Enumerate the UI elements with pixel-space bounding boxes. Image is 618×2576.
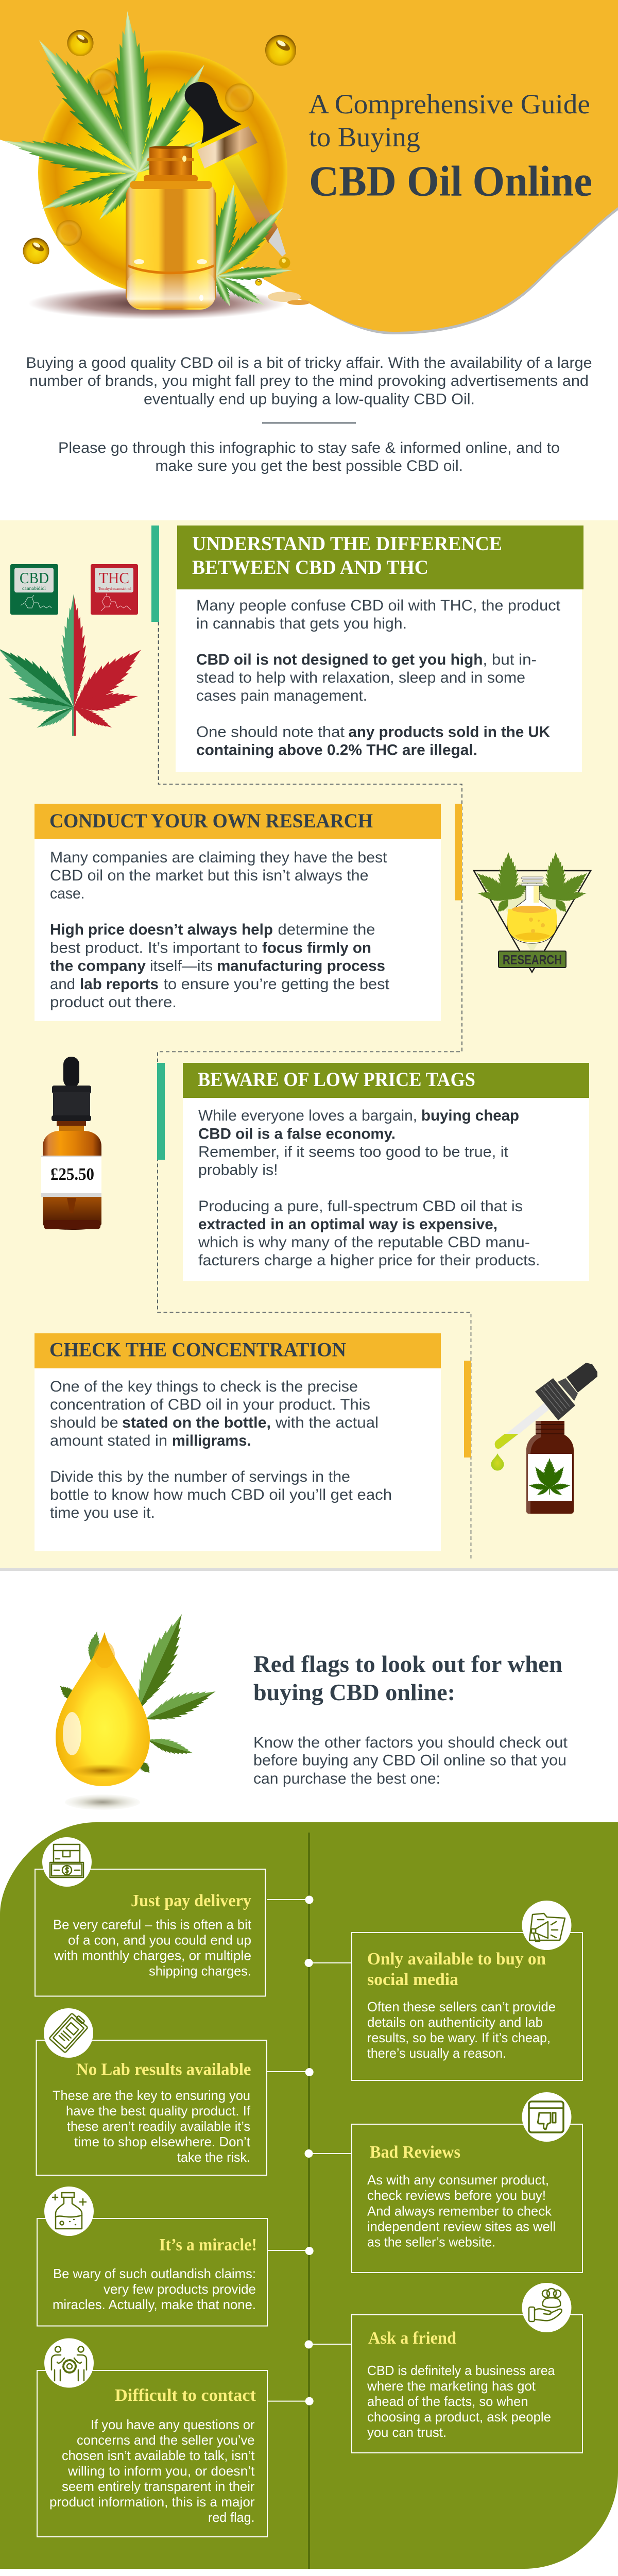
title: social media xyxy=(367,1970,458,1989)
THC label: Tetrahydrocannabinol xyxy=(98,587,131,591)
body: you can trust. xyxy=(367,2425,447,2440)
body text: While everyone loves a bargain, xyxy=(198,1107,417,1124)
body: Be wary of such outlandish claims: xyxy=(53,2266,256,2281)
body text: One should note that xyxy=(196,723,345,741)
icon: CBD and THC labels with split leaf xyxy=(0,564,150,736)
body: product information, this is a major xyxy=(49,2494,255,2510)
title: No Lab results available xyxy=(76,2060,251,2079)
body text: CBD oil is not designed to get you high xyxy=(196,651,483,668)
title: It’s a miracle! xyxy=(159,2235,257,2255)
body text: Many companies are claiming they have the best xyxy=(50,849,387,866)
intro text: make sure you get the best possible CBD oil. xyxy=(156,457,463,474)
body: If you have any questions or xyxy=(91,2417,255,2432)
red flags intro text: before buying any CBD Oil online so that you xyxy=(253,1752,566,1769)
body text: concentration of CBD oil in your product. This xyxy=(50,1396,370,1413)
body text: to ensure you’re getting the best xyxy=(164,976,390,993)
body text: which is why many of the reputable CBD manu- xyxy=(198,1234,530,1251)
icon: dropper over brown bottle xyxy=(491,1363,597,1514)
body text: CBD oil on the market but this isn’t always the xyxy=(50,867,369,884)
green drop xyxy=(491,1453,504,1470)
body text: buying cheap xyxy=(421,1107,519,1124)
panel: check the concentration xyxy=(35,1333,471,1551)
connector xyxy=(305,1959,352,1967)
body: check reviews before you buy! xyxy=(367,2188,546,2203)
heading: BEWARE OF LOW PRICE TAGS xyxy=(198,1069,475,1091)
body: Often these sellers can’t provide xyxy=(367,1999,556,2014)
bottle xyxy=(526,1421,574,1514)
title: CBD Oil Online xyxy=(309,158,592,205)
intro text: Buying a good quality CBD oil is a bit of tricky affair. With the availability of a large xyxy=(26,354,592,371)
body: details on authenticity and lab xyxy=(367,2014,543,2030)
dropper collar xyxy=(197,126,258,168)
connector xyxy=(267,1896,313,1904)
body text: containing above 0.2% THC are illegal. xyxy=(196,742,477,758)
body xyxy=(49,2417,255,2525)
body text: CBD oil is a false economy. xyxy=(198,1125,396,1143)
body text: cases pain management. xyxy=(196,687,367,704)
body text: should be xyxy=(50,1414,118,1431)
title: Only available to buy on xyxy=(367,1950,546,1969)
body text xyxy=(196,597,561,758)
panel: understand the difference xyxy=(151,526,583,772)
body: chosen isn’t available to talk, isn’t xyxy=(62,2448,255,2463)
body text: with the actual xyxy=(275,1414,379,1431)
bubbles xyxy=(56,69,254,246)
title xyxy=(308,89,592,205)
icon: parcel and banknote xyxy=(42,1837,92,1887)
title: Difficult to contact xyxy=(115,2386,256,2405)
body: CBD is definitely a business area xyxy=(367,2363,555,2378)
body: these aren’t readily available it’s xyxy=(67,2119,250,2134)
body: seem entirely transparent in their xyxy=(62,2479,255,2494)
icon: oil drop with leaves xyxy=(56,1608,220,1810)
body: ahead of the facts, so when xyxy=(367,2394,528,2409)
body xyxy=(367,2363,555,2440)
research tag: RESEARCH xyxy=(503,953,562,968)
heading: CHECK THE CONCENTRATION xyxy=(49,1339,346,1361)
body text: High price doesn’t always help xyxy=(50,921,273,938)
icon: lab report clipboard xyxy=(44,2008,93,2058)
body text: manufacturing process xyxy=(217,957,385,975)
body text: best product. It’s important to xyxy=(50,940,258,956)
THC label xyxy=(91,564,138,615)
connector xyxy=(305,2340,352,2348)
body: take the risk. xyxy=(177,2149,250,2165)
panel: beware of low price tags xyxy=(157,1063,589,1281)
title xyxy=(367,1950,546,1989)
heading: BETWEEN CBD AND THC xyxy=(192,556,428,579)
body text: lab reports xyxy=(80,976,159,993)
icon: potion bottle xyxy=(44,2187,94,2236)
body: As with any consumer product, xyxy=(367,2172,549,2188)
heading xyxy=(192,533,502,579)
oil blob xyxy=(38,50,287,295)
card: bad reviews xyxy=(305,2092,582,2273)
drop xyxy=(56,1632,150,1786)
hero illustration: CBD oil bottle, dropper and leaves xyxy=(1,10,310,319)
title: Bad Reviews xyxy=(370,2143,460,2162)
price label: £25.50 xyxy=(50,1165,94,1184)
body: with monthly charges, or multiple xyxy=(54,1948,251,1963)
floor shadow xyxy=(65,1794,140,1810)
body text: One of the key things to check is the precise xyxy=(50,1378,358,1395)
panel: green red flags background xyxy=(0,1822,618,2569)
hero banner background xyxy=(0,0,618,334)
intro text: number of brands, you might fall prey to the mind provoking advertisements and xyxy=(29,372,589,389)
body: of a con, and you could end up xyxy=(68,1932,251,1947)
leaves xyxy=(56,1608,220,1776)
oil bottle xyxy=(126,146,216,310)
timeline spine xyxy=(308,1833,310,2569)
red flags intro text: can purchase the best one: xyxy=(253,1770,440,1787)
CBD label xyxy=(10,564,58,615)
red flags intro text: Know the other factors you should check out xyxy=(253,1734,568,1751)
large cannabis leaf xyxy=(1,10,216,225)
body text xyxy=(198,1107,540,1269)
body: where the marketing has got xyxy=(367,2378,536,2394)
body: choosing a product, ask people xyxy=(367,2409,551,2425)
oil balls xyxy=(23,30,296,285)
body: results, so be wary. If it’s cheap, xyxy=(367,2030,551,2045)
body text: product out there. xyxy=(50,994,177,1011)
body xyxy=(367,1999,556,2061)
card: only available on social media xyxy=(305,1901,582,2080)
bottle label with leaf xyxy=(528,1454,572,1501)
icon: two people with gear xyxy=(44,2338,94,2387)
body: These are the key to ensuring you xyxy=(53,2088,250,2103)
body text: any products sold in the UK xyxy=(348,723,550,741)
panel: conduct your own research xyxy=(35,804,462,1021)
body xyxy=(367,2172,556,2250)
body text: Producing a pure, full-spectrum CBD oil that is xyxy=(198,1198,523,1215)
body text xyxy=(50,1378,392,1521)
red flags heading: buying CBD online: xyxy=(253,1680,455,1705)
body text: case. xyxy=(50,885,84,902)
title: A Comprehensive Guide xyxy=(308,89,590,120)
title: to Buying xyxy=(309,122,420,152)
body xyxy=(53,2088,251,2165)
body text: focus firmly on xyxy=(262,940,371,956)
body: there’s usually a reason. xyxy=(367,2045,506,2061)
body: concerns and the seller you’ve xyxy=(77,2432,254,2448)
body: And always remember to check xyxy=(367,2203,552,2218)
intro text: Please go through this infographic to stay safe & informed online, and to xyxy=(58,439,560,456)
body text: stead to help with relaxation, sleep and in some xyxy=(196,669,525,686)
body text: Many people confuse CBD oil with THC, the product xyxy=(196,597,561,614)
body text xyxy=(50,849,390,1011)
icon: hand holding people xyxy=(522,2283,572,2332)
body: have the best quality product. If xyxy=(66,2103,251,2119)
body text: in cannabis that gets you high. xyxy=(196,615,407,632)
CBD label: cannabidiol xyxy=(22,586,46,591)
heading: UNDERSTAND THE DIFFERENCE xyxy=(192,533,502,555)
heading: CONDUCT YOUR OWN RESEARCH xyxy=(49,810,373,832)
connector xyxy=(267,2397,314,2405)
intro text: eventually end up buying a low-quality CBD Oil. xyxy=(144,391,475,408)
body: miracles. Actually, make that none. xyxy=(53,2297,256,2312)
body: time to shop elsewhere. Don’t xyxy=(74,2134,251,2149)
body text: extracted in an optimal way is expensive, xyxy=(198,1216,497,1233)
emblem leaves xyxy=(472,852,592,915)
icon: folder and megaphone xyxy=(522,1901,572,1950)
body text: the company xyxy=(50,957,146,975)
price label xyxy=(41,1156,101,1197)
card: no lab results xyxy=(36,2008,314,2175)
body: independent review sites as well xyxy=(367,2219,556,2234)
red flags heading xyxy=(253,1651,562,1705)
body: willing to inform you, or doesn’t xyxy=(67,2463,255,2479)
card: ask a friend xyxy=(305,2283,582,2453)
title: Ask a friend xyxy=(368,2329,456,2348)
connector xyxy=(305,2149,352,2158)
dashed connector path xyxy=(158,622,471,1558)
connector xyxy=(267,2247,314,2255)
body text: amount stated in xyxy=(50,1432,167,1449)
intro text xyxy=(26,354,592,474)
body text: determine the xyxy=(278,921,375,938)
body: red flag. xyxy=(208,2510,254,2525)
dropper bulb xyxy=(185,82,242,144)
connector xyxy=(267,2068,314,2076)
body text: bottle to know how much CBD oil you’ll get each xyxy=(50,1486,392,1503)
card: just pay delivery xyxy=(35,1837,313,1996)
body xyxy=(53,1917,252,1979)
body text: Remember, if it seems too good to be true, it xyxy=(198,1144,509,1160)
shadow under bottle xyxy=(28,287,286,319)
card: difficult to contact xyxy=(37,2338,314,2537)
body: Be very careful – this is often a bit xyxy=(53,1917,252,1932)
CBD label: CBD xyxy=(20,569,49,587)
red flags intro text xyxy=(253,1734,568,1787)
body text: itself—its xyxy=(150,957,213,975)
icon: amber bottle with price label xyxy=(41,1057,101,1230)
dropper pipette glass xyxy=(224,154,290,268)
icon: research emblem xyxy=(472,852,592,972)
title: Just pay delivery xyxy=(131,1891,251,1910)
body: shipping charges. xyxy=(149,1963,251,1979)
body text: time you use it. xyxy=(50,1504,155,1521)
flask xyxy=(507,877,557,943)
red flags heading: Red flags to look out for when xyxy=(253,1651,562,1677)
body: very few products provide xyxy=(104,2281,256,2297)
THC label: THC xyxy=(99,569,129,587)
card: it's a miracle xyxy=(37,2187,314,2326)
cream tips section background xyxy=(0,520,618,1571)
body: as the seller’s website. xyxy=(367,2234,495,2250)
split cannabis leaf xyxy=(0,594,150,736)
small cannabis leaf xyxy=(205,181,293,311)
body text: Divide this by the number of servings in the xyxy=(50,1468,350,1485)
icon: thumbs down window xyxy=(522,2092,572,2142)
body text: stated on the bottle, xyxy=(122,1414,271,1431)
body text: milligrams. xyxy=(172,1432,251,1449)
body text: , but in- xyxy=(483,651,537,668)
body text: probably is! xyxy=(198,1162,278,1179)
puddle xyxy=(268,292,310,305)
dropper xyxy=(495,1363,597,1449)
body text: and xyxy=(50,976,75,993)
body xyxy=(53,2266,256,2312)
body text: facturers charge a higher price for their products. xyxy=(198,1252,540,1269)
